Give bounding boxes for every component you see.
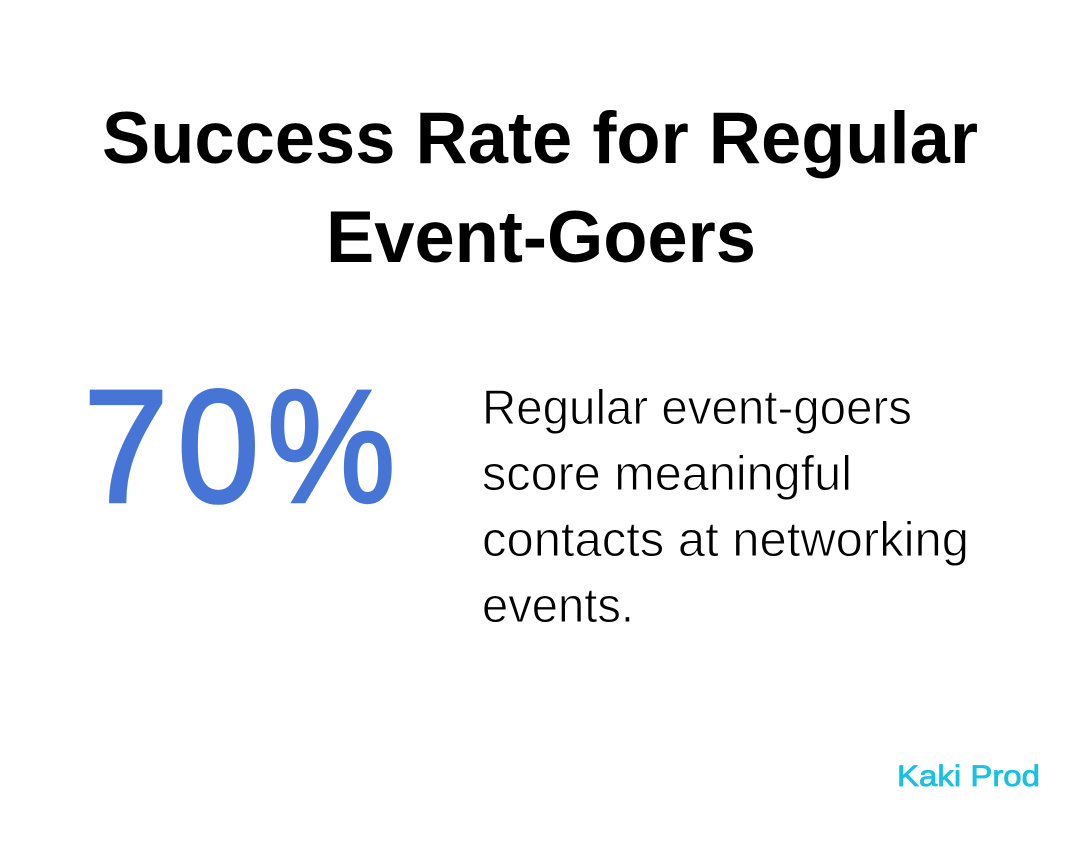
big stat: 70%: % xyxy=(267,357,395,536)
big stat: 70%: 7 xyxy=(84,358,168,536)
stat description: events. xyxy=(482,579,634,633)
big stat: 70%: 0 xyxy=(178,357,259,536)
stat description xyxy=(482,381,969,633)
stat description: contacts at networking xyxy=(482,513,969,567)
big stat: 70% xyxy=(84,357,395,536)
title: Success Rate for Regular xyxy=(102,98,978,179)
stat description: score meaningful xyxy=(482,447,852,501)
stat description: Regular event-goers xyxy=(482,381,912,435)
logo: Kaki Prod: Kaki Prod xyxy=(897,760,1040,793)
title xyxy=(102,98,978,278)
title: Event-Goers xyxy=(326,197,756,278)
